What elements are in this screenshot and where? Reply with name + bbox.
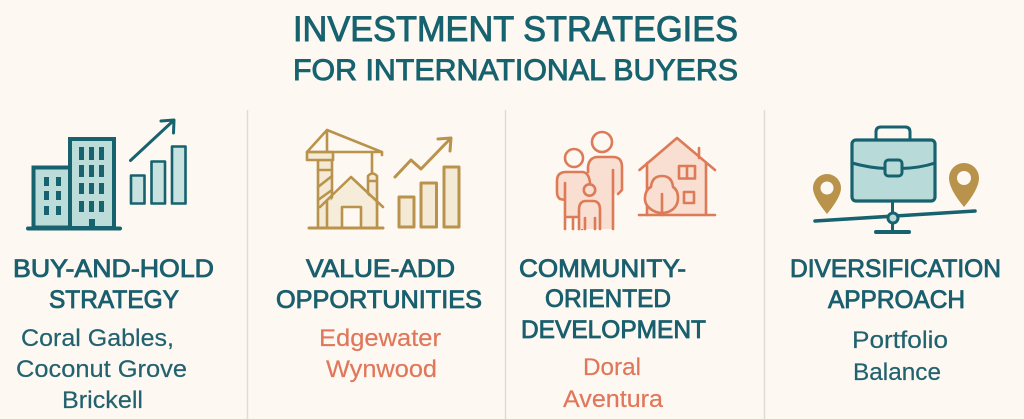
- heading: ORIENTED: [545, 285, 671, 313]
- icon: family and house with tree: [557, 132, 715, 229]
- panel: buy-and-hold strategy: [13, 120, 214, 414]
- locations: Aventura: [563, 386, 664, 413]
- heading: [13, 255, 214, 314]
- locations: [319, 325, 441, 383]
- icon: crane, house and growth chart: [307, 130, 459, 228]
- heading: COMMUNITY-: [519, 255, 686, 283]
- icon: briefcase on balance with map pins: [813, 127, 979, 232]
- focus: Portfolio: [852, 327, 948, 354]
- locations: Edgewater: [319, 325, 441, 352]
- locations: Coral Gables,: [21, 325, 174, 352]
- heading: STRATEGY: [49, 286, 179, 314]
- title: INVESTMENT STRATEGIES: [293, 10, 738, 49]
- heading: VALUE-ADD: [306, 255, 455, 283]
- locations: [563, 354, 664, 413]
- heading: DIVERSIFICATION: [790, 255, 1001, 283]
- heading: [790, 255, 1001, 314]
- panel: value-add opportunities: [276, 130, 482, 383]
- heading: APPROACH: [828, 286, 965, 314]
- focus: [852, 327, 948, 386]
- locations: Coconut Grove: [16, 356, 187, 383]
- panel: community-oriented development: [519, 132, 715, 413]
- locations: Brickell: [62, 387, 143, 414]
- heading: OPPORTUNITIES: [276, 286, 482, 314]
- focus: Balance: [853, 359, 941, 386]
- locations: [16, 325, 187, 414]
- locations: Wynwood: [326, 356, 437, 383]
- panel: diversification approach: [790, 127, 1001, 386]
- title: FOR INTERNATIONAL BUYERS: [293, 54, 738, 87]
- heading: [519, 255, 706, 344]
- heading: [276, 255, 482, 314]
- locations: Doral: [583, 354, 641, 381]
- icon: buildings with rising bar chart: [28, 120, 186, 228]
- heading: DEVELOPMENT: [521, 316, 706, 344]
- heading: BUY-AND-HOLD: [13, 255, 214, 283]
- title: [293, 10, 738, 87]
